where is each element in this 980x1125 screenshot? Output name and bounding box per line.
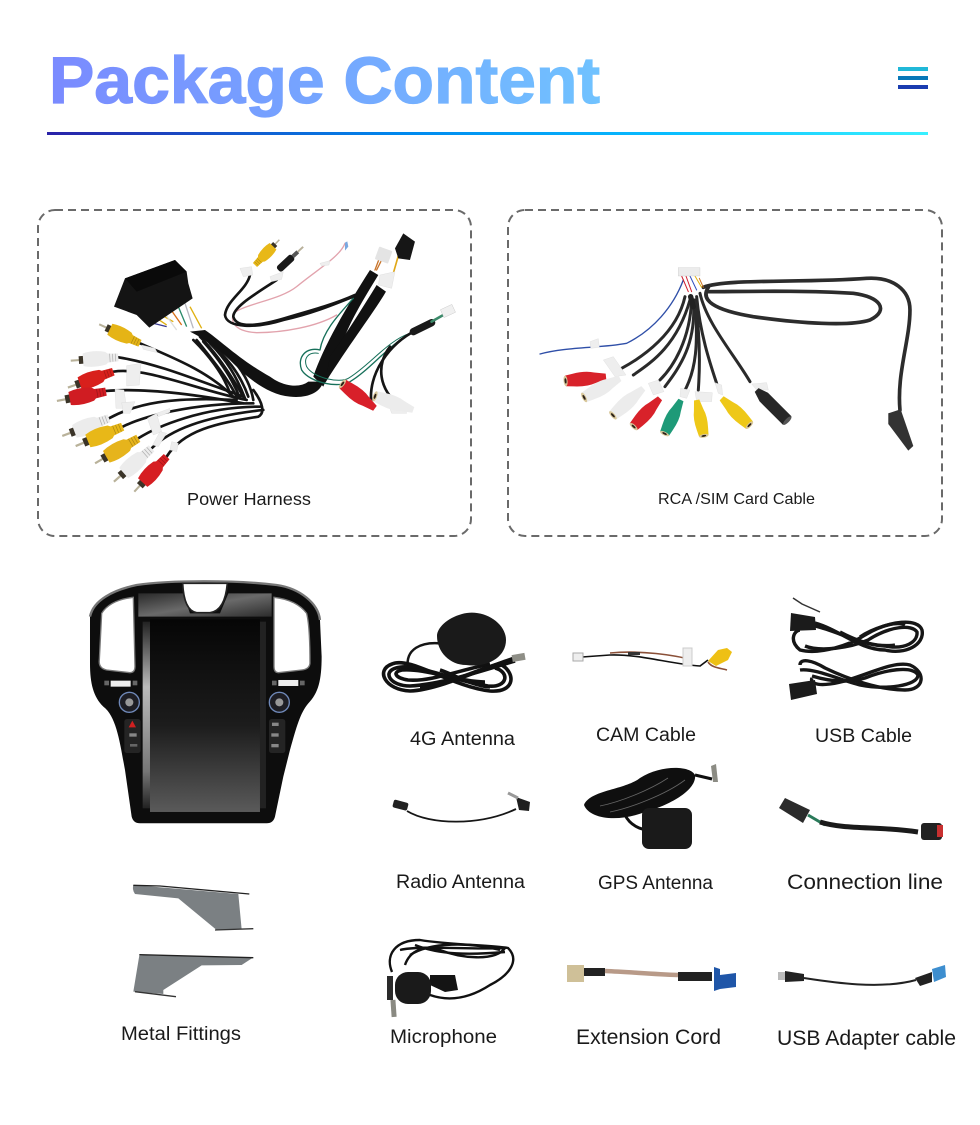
cable	[778, 965, 946, 986]
label: Metal Fittings	[121, 1024, 241, 1045]
item: 4G antenna	[384, 613, 526, 750]
item: GPS antenna	[584, 764, 718, 894]
audio jack	[276, 244, 306, 273]
label: RCA /SIM Card Cable	[658, 491, 815, 508]
antenna	[584, 764, 718, 849]
item: connection line	[779, 798, 943, 894]
item: metal fittings	[121, 885, 253, 1045]
label: Connection line	[787, 871, 943, 894]
header rule	[47, 132, 928, 135]
item: CAM cable	[573, 648, 732, 746]
label: USB Cable	[815, 726, 912, 747]
antenna	[384, 613, 526, 691]
cables	[789, 598, 922, 700]
wire flags	[590, 339, 768, 402]
item: USB cable	[789, 598, 922, 747]
head unit	[90, 581, 322, 823]
colored wires at main connector	[147, 303, 202, 330]
microphone	[387, 940, 513, 1017]
label: USB Adapter cable	[777, 1027, 956, 1050]
label: Radio Antenna	[396, 872, 525, 893]
icon: menu	[898, 67, 928, 89]
label: GPS Antenna	[598, 873, 713, 894]
cable	[392, 793, 530, 822]
cable illustration	[540, 268, 913, 451]
item: USB adapter cable	[777, 965, 956, 1050]
panel: power harness	[38, 210, 471, 536]
title: Package Content	[49, 43, 600, 117]
cable	[779, 798, 943, 840]
brackets	[133, 885, 253, 997]
cable	[573, 648, 732, 670]
label: Microphone	[390, 1027, 497, 1048]
sleeves	[190, 270, 386, 397]
small connectors	[375, 246, 392, 264]
item: microphone	[387, 940, 513, 1048]
label: Extension Cord	[576, 1026, 721, 1049]
harness illustration	[55, 233, 456, 497]
label: 4G Antenna	[410, 729, 515, 750]
item: radio antenna	[392, 793, 530, 893]
audio socket	[752, 386, 793, 426]
wire flags	[115, 261, 407, 452]
label: CAM Cable	[596, 725, 696, 746]
label: Power Harness	[187, 489, 311, 509]
RCA plugs	[55, 236, 416, 497]
cord	[567, 965, 736, 991]
item: extension cord	[567, 965, 736, 1049]
panel: RCA / SIM card cable	[508, 210, 942, 536]
main connector	[114, 260, 193, 328]
RCA sockets	[563, 370, 756, 439]
